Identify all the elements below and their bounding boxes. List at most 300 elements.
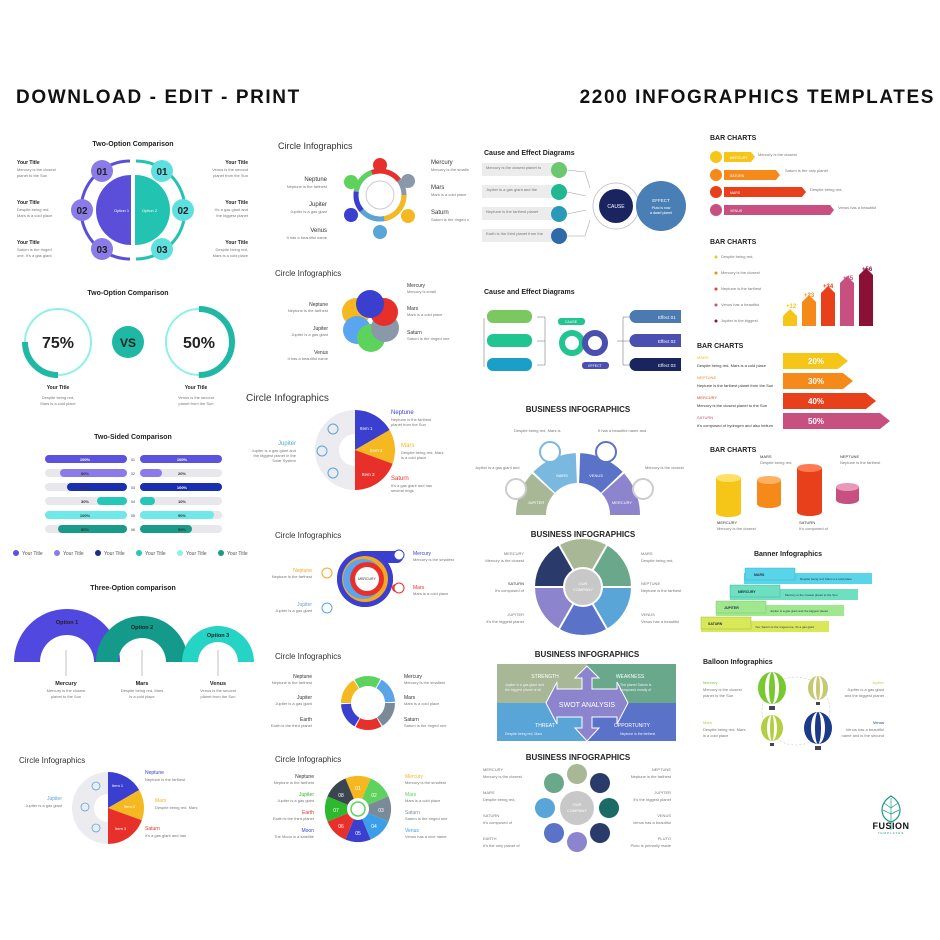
panel: circle infographics ring: Jupiter is a gas giant xyxy=(290,209,328,214)
panel: two-option comparison 1: 03 xyxy=(96,245,108,256)
panel: circle infographics segmented: The Moon is a satellite xyxy=(274,834,315,839)
panel: balloon infographics: is a cold place xyxy=(703,733,729,738)
panel: two-sided comparison: 50% xyxy=(178,527,186,532)
panel: business infographics fan: It has a beautiful name and xyxy=(598,428,646,433)
panel: circle infographics flower: Jupiter xyxy=(313,326,328,332)
panel: circle infographics pie small: Circle Infographics xyxy=(19,756,85,765)
panel: swot analysis: BUSINESS INFOGRAPHICS xyxy=(535,650,640,659)
panel: two-option comparison 2: 75% xyxy=(42,335,74,352)
panel: business infographics circles: It's the biggest planet xyxy=(633,797,672,802)
panel: bar charts 3: 40% xyxy=(808,397,824,406)
panel: two-option comparison 2: Mars is a cold place xyxy=(40,401,76,406)
panel: two-option comparison 1: Your Title xyxy=(17,160,40,166)
panel: bar charts 2: Despite being red, xyxy=(721,254,753,259)
panel: bar charts 2: BAR CHARTS xyxy=(710,239,757,246)
panel: balloon infographics: name and is the second xyxy=(842,733,884,738)
panel: cause and effect 1: CAUSE xyxy=(607,204,625,210)
panel: two-option comparison 2: Your Title xyxy=(47,385,70,391)
panel: circle infographics pie large: several rings xyxy=(391,488,414,493)
panel: two-sided comparison: 90% xyxy=(178,513,186,518)
panel: circle infographics concentric xyxy=(272,531,455,613)
panel: bar charts 1 xyxy=(710,135,876,216)
panel: circle infographics arrows: Neptune is the farthest xyxy=(272,680,313,685)
panel: two-sided comparison: 20% xyxy=(178,471,186,476)
panel: circle infographics flower: Mercury xyxy=(407,283,426,289)
panel: circle infographics flower: Mercury is small xyxy=(407,289,436,294)
panel: business infographics wheel: MARS xyxy=(641,551,653,556)
panel: two-option comparison 1: 01 xyxy=(96,167,108,178)
panel: business infographics fan: Jupiter is a gas giant and xyxy=(475,465,519,470)
panel: bar charts 3: MERCURY xyxy=(697,395,717,400)
panel: circle infographics flower: Neptune is the farthest xyxy=(288,308,329,313)
panel: bar charts 3: NEPTUNE xyxy=(697,375,716,380)
panel: two-option comparison 2: planet from the Sun xyxy=(179,401,213,406)
panel: swot analysis xyxy=(497,650,676,741)
panel: two-sided comparison: 80% xyxy=(81,527,89,532)
panel: circle infographics arrows: Jupiter xyxy=(297,695,312,701)
panel: bar charts 1: BAR CHARTS xyxy=(710,135,757,142)
panel: cause and effect 1: Mercury is the closest planet to xyxy=(486,165,542,170)
panel: circle infographics concentric: Jupiter is a gas giant xyxy=(275,608,313,613)
panel: swot analysis: Despite being red, Mars xyxy=(505,732,542,736)
panel: circle infographics ring xyxy=(278,141,470,240)
header right: 2200 INFOGRAPHICS TEMPLATES xyxy=(580,87,935,108)
panel: bar charts 4 cylinders: Despite being red, xyxy=(760,460,792,465)
panel: circle infographics pie small: Jupiter is a gas giant xyxy=(25,803,63,808)
panel: three-option comparison: Three-Option comparison xyxy=(90,585,176,592)
panel: business infographics wheel: BUSINESS INFOGRAPHICS xyxy=(531,530,636,539)
panel: circle infographics segmented: Mercury xyxy=(405,774,424,780)
panel: circle infographics pie large: Jupiter is a gas giant and xyxy=(252,448,296,453)
panel: three-option comparison: Mercury xyxy=(55,681,78,687)
panel: bar charts 4 cylinders xyxy=(710,447,881,531)
panel: bar charts 1: SATURN xyxy=(730,174,745,178)
panel: three-option comparison: is a cold place xyxy=(129,694,155,699)
panel: cause and effect 2: Effect 02 xyxy=(658,339,676,344)
panel: circle infographics segmented: Neptune is the farthest xyxy=(274,780,315,785)
panel: business infographics circles: Neptune is the farthest xyxy=(631,774,672,779)
panel: business infographics fan: MARS xyxy=(556,473,568,478)
panel: business infographics wheel: OUR xyxy=(579,581,588,586)
panel: business infographics fan: BUSINESS INFOGRAPHICS xyxy=(526,405,631,414)
panel: cause and effect 1: Cause and Effect Diagrams xyxy=(484,150,575,157)
panel: swot analysis: SWOT ANALYSIS xyxy=(559,702,615,709)
panel: two-option comparison 2: Despite being red, xyxy=(42,395,74,400)
panel: circle infographics segmented: 05 xyxy=(355,831,361,837)
panel: bar charts 4 cylinders: BAR CHARTS xyxy=(710,447,757,454)
panel: circle infographics pie small: Despite being red, Mars xyxy=(155,805,197,810)
panel: two-sided comparison: 70% xyxy=(81,485,89,490)
legend: Your Title xyxy=(227,551,248,557)
panel: two-option comparison 1: planet from the Sun xyxy=(213,173,248,178)
panel: swot analysis: Neptune is the farthest xyxy=(620,732,655,736)
panel: business infographics wheel: It's the biggest planet xyxy=(486,619,525,624)
panel: circle infographics pie large: Saturn xyxy=(391,476,409,482)
panel: banner infographics: Banner Infographics xyxy=(754,551,822,558)
panel: circle infographics pie large: Item 1 xyxy=(360,426,373,431)
legend: Your Title xyxy=(145,551,166,557)
panel: two-sided comparison: 100% xyxy=(177,485,188,490)
panel: bar charts 3: Mercury is the closest planet to the Sun xyxy=(697,403,767,408)
panel: balloon infographics: Venus has a beautiful xyxy=(846,727,884,732)
panel: business infographics circles: Pluto is primarily made xyxy=(631,843,672,848)
panel: bar charts 2: Jupiter is the biggest xyxy=(721,318,759,323)
panel: two-sided comparison: 30% xyxy=(81,499,89,504)
panel: business infographics wheel: VENUS xyxy=(641,612,655,617)
panel: circle infographics pie small: Item 2 xyxy=(124,804,136,809)
panel: business infographics circles: COMPANY xyxy=(567,808,587,813)
panel: bar charts 2: +23 xyxy=(804,293,815,299)
panel: circle infographics flower: Neptune xyxy=(309,302,328,308)
panel: two-option comparison 1: It's a gas giant and xyxy=(215,207,248,212)
panel: circle infographics arrows: Mars is a cold place xyxy=(404,701,440,706)
panel: bar charts 2: Mercury is the closest xyxy=(721,270,761,275)
panel: cause and effect 2: Effect 03 xyxy=(658,363,676,368)
panel: two-sided comparison: 04 xyxy=(131,500,135,504)
panel: two-option comparison 1: Saturn is the ringed xyxy=(17,247,52,252)
panel: circle infographics pie small: Neptune xyxy=(145,770,164,776)
panel: circle infographics arrows: Earth xyxy=(300,717,312,723)
panel: circle infographics ring: Mars is a cold place xyxy=(431,192,467,197)
panel: bar charts 2: +12 xyxy=(786,304,797,310)
panel: business infographics circles: It's the only planet of xyxy=(483,843,520,848)
panel: business infographics circles: MERCURY xyxy=(483,767,503,772)
panel: circle infographics arrows: Saturn xyxy=(404,717,419,723)
panel: cause and effect 1: Pluto is now xyxy=(652,206,671,210)
panel: balloon infographics: Venus xyxy=(873,720,884,725)
panel: business infographics circles: Venus has a beautiful xyxy=(633,820,671,825)
panel: circle infographics pie small: Neptune is the farthest xyxy=(145,777,186,782)
panel: three-option comparison: planet to the Sun xyxy=(51,694,81,699)
panel: circle infographics segmented: Jupiter xyxy=(299,792,314,798)
panel: circle infographics segmented: Circle Infographics xyxy=(275,755,341,764)
panel: two-option comparison 1: Mars is a cold place xyxy=(213,253,249,258)
panel: circle infographics flower: Saturn is the ringed one xyxy=(407,336,450,341)
panel: circle infographics ring: Saturn is the ringed o xyxy=(431,217,470,222)
panel: business infographics circles: BUSINESS INFOGRAPHICS xyxy=(526,753,631,762)
panel: bar charts 3: Despite being red, Mars is a cold place xyxy=(697,363,767,368)
legend: Your Title xyxy=(22,551,43,557)
panel: bar charts 1: Despite being red, xyxy=(810,187,842,192)
panel: two-option comparison 1 xyxy=(17,141,249,260)
panel: business infographics fan: JUPITER xyxy=(528,500,544,505)
panel: circle infographics arrows: Circle Infographics xyxy=(275,652,341,661)
panel: bar charts 4 cylinders: NEPTUNE xyxy=(840,454,859,459)
panel: three-option comparison: Option 1 xyxy=(56,620,78,626)
panel: circle infographics segmented: 07 xyxy=(333,808,339,814)
panel: business infographics wheel: COMPANY xyxy=(573,587,593,592)
panel: two-option comparison 1: one. It's a gas giant xyxy=(17,253,52,258)
panel: bar charts 3: Neptune is the farthest planet from the Sun xyxy=(697,383,773,388)
panel: balloon infographics: and the biggest planet xyxy=(845,693,885,698)
panel: bar charts 1: VENUS xyxy=(730,209,743,213)
panel: bar charts 3: MARS xyxy=(697,355,709,360)
panel: balloon infographics: Despite being red, Mars xyxy=(703,727,745,732)
panel: two-option comparison 1: planet to the Sun xyxy=(17,173,47,178)
panel: circle infographics pie small: It's a gas giant and has xyxy=(145,833,186,838)
panel: bar charts 4 cylinders: SATURN xyxy=(799,520,815,525)
panel: swot analysis: the biggest planet of all xyxy=(505,688,541,692)
panel: circle infographics flower: It has a beautiful name xyxy=(288,356,329,361)
panel: circle infographics segmented: 04 xyxy=(371,824,377,830)
panel: business infographics fan: VENUS xyxy=(589,473,603,478)
panel: cause and effect 2: CAUSE xyxy=(565,320,578,324)
panel: business infographics wheel: It's composed of xyxy=(495,588,525,593)
panel: bar charts 3: 50% xyxy=(808,417,824,426)
panel: bar charts 4 cylinders: It's composed of xyxy=(799,526,829,531)
panel: business infographics circles: Despite being red, xyxy=(483,797,515,802)
panel: bar charts 1: Venus has a beautiful xyxy=(838,205,876,210)
panel: circle infographics pie small: Jupiter xyxy=(47,796,62,802)
panel: cause and effect 2: EFFECT xyxy=(588,364,603,368)
panel: business infographics fan xyxy=(475,405,685,515)
panel: business infographics circles: JUPITER xyxy=(654,790,671,795)
panel: circle infographics pie large: the biggest planet in the xyxy=(254,453,297,458)
panel: circle infographics concentric: Circle Infographics xyxy=(275,531,341,540)
panel: circle infographics segmented: Earth is the third planet xyxy=(273,816,315,821)
panel: circle infographics segmented: 08 xyxy=(338,793,344,799)
panel: business infographics circles: VENUS xyxy=(657,813,671,818)
panel: circle infographics pie large: Item 2 xyxy=(370,448,383,453)
panel: two-option comparison 1: 01 xyxy=(156,167,168,178)
panel: banner infographics: Despite being red, Mars is a cold place xyxy=(800,577,852,581)
panel: circle infographics flower: Mars is a cold place xyxy=(407,312,443,317)
panel: circle infographics segmented: Mars xyxy=(405,792,417,798)
panel: business infographics circles: EARTH xyxy=(483,836,497,841)
panel: business infographics circles: It's composed of xyxy=(483,820,513,825)
panel: business infographics wheel: NEPTUNE xyxy=(641,581,660,586)
panel: swot analysis: composed mostly of xyxy=(620,688,651,692)
panel: bar charts 1: MERCURY xyxy=(730,156,748,160)
panel: circle infographics pie large: Mars xyxy=(401,443,414,449)
panel: circle infographics pie large: Item 3 xyxy=(362,472,375,477)
panel: two-option comparison 2: Venus is the second xyxy=(178,395,214,400)
panel: circle infographics segmented: Venus xyxy=(405,828,419,834)
panel: circle infographics pie small: Saturn xyxy=(145,826,160,832)
header left: DOWNLOAD - EDIT - PRINT xyxy=(16,87,301,108)
panel: business infographics circles xyxy=(483,753,672,852)
panel: circle infographics ring: Neptune is the farthest xyxy=(287,184,328,189)
panel: bar charts 4 cylinders: MARS xyxy=(760,454,772,459)
panel: business infographics wheel: MERCURY xyxy=(504,551,524,556)
panel: circle infographics pie large: Jupiter xyxy=(278,441,296,447)
panel: banner infographics: JUPITER xyxy=(724,606,739,610)
panel: banner infographics: Mercury is the closest planet to the Sun xyxy=(785,593,838,597)
panel: circle infographics segmented: Earth xyxy=(302,810,314,816)
panel: two-sided comparison: 100% xyxy=(80,513,91,518)
panel: swot analysis: Jupiter is a gas giant and xyxy=(505,683,544,687)
panel: two-sided comparison: Two-Sided Comparison xyxy=(94,434,172,441)
panel: cause and effect 1: EFFECT xyxy=(652,198,670,203)
panel: circle infographics segmented: Venus has a nice name xyxy=(405,834,447,839)
panel: balloon infographics xyxy=(703,659,885,750)
panel: circle infographics ring: Mars xyxy=(431,185,444,191)
panel: two-option comparison 1: Your Title xyxy=(17,240,40,246)
panel: balloon infographics: Mars xyxy=(703,720,712,725)
panel: circle infographics pie large: Circle Infographics xyxy=(246,393,329,404)
panel: two-sided comparison: 02 xyxy=(131,472,135,476)
panel: two-option comparison 2 xyxy=(25,290,232,406)
panel: circle infographics arrows: Saturn is the ringed one xyxy=(404,723,447,728)
panel: swot analysis: OPPORTUNITY xyxy=(614,723,651,729)
panel: circle infographics concentric: Mercury xyxy=(413,551,432,557)
panel: circle infographics concentric: Mars xyxy=(413,585,425,591)
panel: circle infographics pie small: Item 3 xyxy=(115,826,127,831)
panel: two-option comparison 1: Your Title xyxy=(225,240,248,246)
panel: business infographics circles: PLUTO xyxy=(658,836,671,841)
panel: business infographics wheel: Despite being red, xyxy=(641,558,673,563)
panel: circle infographics segmented: Saturn is the ringed one xyxy=(405,816,448,821)
panel: circle infographics segmented: 06 xyxy=(338,824,344,830)
panel: business infographics wheel: Mercury is the closest xyxy=(485,558,525,563)
panel: balloon infographics: Mercury xyxy=(703,680,717,685)
panel: circle infographics arrows: Neptune xyxy=(293,674,312,680)
panel: circle infographics arrows: Mercury xyxy=(404,674,423,680)
panel: two-option comparison 1: the biggest planet xyxy=(216,213,249,218)
panel: banner infographics: SATURN xyxy=(708,622,723,626)
panel: circle infographics pie large xyxy=(246,393,443,493)
panel: circle infographics pie large: Neptune xyxy=(391,410,414,416)
panel: circle infographics pie large: is a cold place xyxy=(401,455,427,460)
panel: three-option comparison: Venus xyxy=(210,681,226,687)
panel: bar charts 2 xyxy=(710,239,873,326)
panel: bar charts 3: 30% xyxy=(808,377,824,386)
panel: circle infographics segmented: Moon xyxy=(301,828,314,834)
panel: balloon infographics: Mercury is the closest xyxy=(703,687,743,692)
panel: balloon infographics: Jupiter is a gas giant xyxy=(847,687,885,692)
panel: business infographics wheel: Neptune is the farthest xyxy=(641,588,682,593)
panel: bar charts 1: Saturn is the only planet xyxy=(785,168,829,173)
panel: two-option comparison 1: Despite being red, xyxy=(17,207,49,212)
panel: business infographics circles: OUR xyxy=(573,802,582,807)
panel: circle infographics flower: Saturn xyxy=(407,330,422,336)
panel: bar charts 3: 20% xyxy=(808,357,824,366)
panel: two-option comparison 2: VS xyxy=(120,336,136,350)
panel: three-option comparison: Option 3 xyxy=(207,633,229,639)
panel: circle infographics arrows: Jupiter is a gas giant xyxy=(275,701,313,706)
panel: two-option comparison 2: Your Title xyxy=(185,385,208,391)
panel: two-sided comparison: 10% xyxy=(178,499,186,504)
panel: circle infographics segmented xyxy=(273,755,448,842)
panel: circle infographics pie small xyxy=(19,756,197,844)
panel: bar charts 4 cylinders: Neptune is the farthest xyxy=(840,460,881,465)
panel: three-option comparison: Mars xyxy=(136,681,148,687)
panel: circle infographics concentric: Jupiter xyxy=(297,602,312,608)
panel: circle infographics pie large: Neptune is the farthest xyxy=(391,417,432,422)
panel: two-sided comparison: 80% xyxy=(81,471,89,476)
panel: two-option comparison 1: Despite being red, xyxy=(216,247,248,252)
legend: Your Title xyxy=(104,551,125,557)
panel: two-option comparison 1: Venus is the second xyxy=(212,167,248,172)
panel: circle infographics ring: Saturn xyxy=(431,210,449,216)
panel: circle infographics ring: It has a beautiful name xyxy=(287,235,328,240)
panel: circle infographics ring: Venus xyxy=(310,228,327,234)
panel: circle infographics flower: Mars xyxy=(407,306,419,312)
panel: two-sided comparison: 100% xyxy=(177,457,188,462)
panel: two-option comparison 2: 50% xyxy=(183,335,215,352)
panel: cause and effect 1: Neptune is the farthest planet xyxy=(486,209,539,214)
panel: circle infographics segmented: 02 xyxy=(371,793,377,799)
panel: circle infographics concentric: Mercury is the smallest xyxy=(413,557,455,562)
panel: business infographics fan: MERCURY xyxy=(612,500,632,505)
panel: cause and effect 1: Earth is the third planet from the xyxy=(486,231,544,236)
panel: circle infographics segmented: Neptune xyxy=(295,774,314,780)
panel: circle infographics pie large: Solar System xyxy=(272,458,297,463)
panel: cause and effect 1: Jupiter is a gas giant and the xyxy=(486,187,538,192)
panel: circle infographics concentric: Neptune xyxy=(293,568,312,574)
panel: circle infographics concentric: Mars is a cold place xyxy=(413,591,449,596)
legend: Your Title xyxy=(63,551,84,557)
panel: circle infographics arrows: Earth is the third planet xyxy=(271,723,313,728)
panel: circle infographics concentric: MERCURY xyxy=(358,577,376,581)
panel: two-sided comparison: 100% xyxy=(80,457,91,462)
panel: banner infographics: Yes, Saturn is the ringed one, it's a gas giant xyxy=(755,625,814,629)
panel: business infographics wheel: Venus has a beautiful xyxy=(641,619,679,624)
panel: circle infographics segmented: 01 xyxy=(355,786,361,792)
panel: circle infographics flower: Jupiter is a gas giant xyxy=(291,332,329,337)
panel: two-sided comparison xyxy=(45,434,222,533)
panel: bar charts 4 cylinders: Mercury is the closest xyxy=(717,526,757,531)
panel: circle infographics concentric: Neptune is the farthest xyxy=(272,574,313,579)
panel: bar charts 2: +56 xyxy=(862,267,873,273)
panel: bar charts 3: BAR CHARTS xyxy=(697,343,744,350)
panel: bar charts 2: Neptune is the farthest xyxy=(721,286,762,291)
panel: circle infographics pie small: Item 1 xyxy=(112,783,124,788)
panel: bar charts 3 xyxy=(697,343,890,429)
panel: two-sided comparison: 06 xyxy=(131,528,135,532)
panel: two-option comparison 1: 02 xyxy=(177,206,189,217)
panel: circle infographics flower: Circle Infographics xyxy=(275,269,341,278)
panel: business infographics circles: SATURN xyxy=(483,813,499,818)
panel: swot analysis: STRENGTH xyxy=(531,674,559,680)
panel: three-option comparison: Despite being red, Mars xyxy=(121,688,163,693)
panel: circle infographics ring: Mercury is the smalle xyxy=(431,167,470,172)
panel: two-option comparison 1: 03 xyxy=(156,245,168,256)
panel: two-option comparison 1: Option 1 xyxy=(114,208,130,213)
panel: banner infographics: Jupiter is a gas giant and the biggest planet xyxy=(770,609,828,613)
panel: circle infographics segmented: Mercury is the smallest xyxy=(405,780,447,785)
panel: bar charts 2: Venus has a beautiful xyxy=(721,302,759,307)
panel: cause and effect 2: Effect 01 xyxy=(658,315,676,320)
panel: two-option comparison 1: Your Title xyxy=(17,200,40,206)
panel: business infographics circles: Mercury is the closest xyxy=(483,774,523,779)
panel: three-option comparison: Option 2 xyxy=(131,625,153,631)
panel: three-option comparison: planet from the Sun xyxy=(201,694,235,699)
panel: two-option comparison 1: Two-Option Comparison xyxy=(92,141,174,148)
panel: cause and effect 1: a dwarf planet xyxy=(650,211,672,215)
panel: three-option comparison: Mercury is the closest xyxy=(47,688,86,693)
panel: three-option comparison xyxy=(14,585,254,699)
panel: bar charts 1: MARS xyxy=(730,191,741,195)
panel: bar charts 4 cylinders: MERCURY xyxy=(717,520,737,525)
panel: swot analysis: The planet Saturn is xyxy=(620,683,652,687)
panel: circle infographics segmented: Jupiter is a gas giant xyxy=(277,798,315,803)
panel: circle infographics arrows: Mars xyxy=(404,695,416,701)
panel: business infographics fan: Despite being red, Mars is xyxy=(514,428,560,433)
panel: two-option comparison 1: Your Title xyxy=(225,200,248,206)
panel: circle infographics ring: Jupiter xyxy=(309,202,327,208)
panel: bar charts 2: +45 xyxy=(843,276,854,282)
panel: three-option comparison: Venus is the second xyxy=(200,688,236,693)
panel: balloon infographics: Jupiter xyxy=(872,680,885,685)
panel: bar charts 3: SATURN xyxy=(697,415,713,420)
panel: bar charts 3: It's composed of hydrogen and also helium xyxy=(697,423,774,428)
logo: fusion templates: FUSION xyxy=(872,821,910,831)
panel: balloon infographics: planet to the Sun xyxy=(703,693,733,698)
panel: business infographics circles: NEPTUNE xyxy=(652,767,671,772)
panel: cause and effect 1 xyxy=(482,150,686,244)
panel: banner infographics: MARS xyxy=(754,573,765,577)
